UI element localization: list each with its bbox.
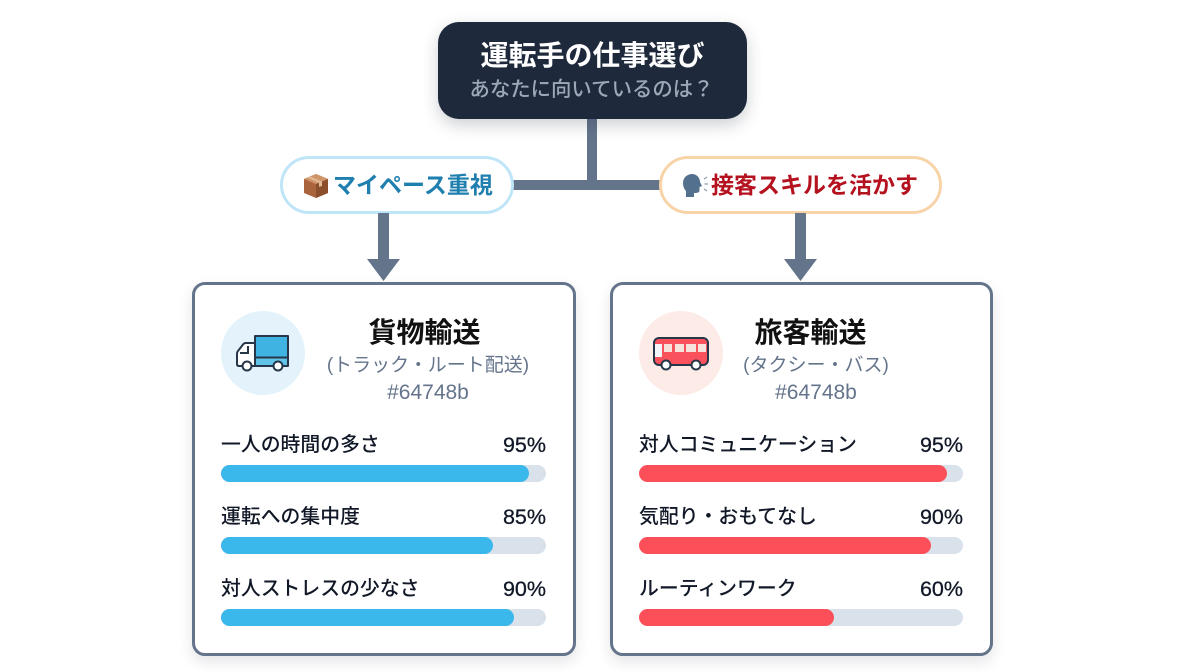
panel: freight card [192, 282, 576, 656]
pill: customer skills [659, 156, 942, 214]
label: ルーティンワーク [639, 578, 797, 600]
label: 運転への集中度 [221, 506, 360, 528]
passenger row 2 [639, 505, 963, 554]
passenger subtitle: (タクシー・バス) [743, 355, 889, 376]
pill label: マイペース重視 [333, 172, 493, 198]
label: 対人コミュニケーション [639, 434, 857, 456]
bus drawing [653, 337, 709, 370]
bar [639, 465, 963, 482]
freight row 2 [221, 505, 546, 554]
value: 60% [920, 577, 963, 601]
passenger heading: 旅客輸送 [754, 317, 866, 348]
value: 95% [920, 433, 963, 457]
label: 気配り・おもてなし [639, 506, 817, 528]
icon: package [304, 174, 328, 198]
freight code: #64748b [387, 381, 469, 404]
arrow: to passenger [784, 213, 817, 281]
truck drawing [236, 335, 289, 372]
freight row 3 [221, 577, 546, 626]
bar [221, 465, 546, 482]
heading: 運転手の仕事選び [480, 40, 704, 71]
bar [221, 609, 546, 626]
bar [639, 609, 963, 626]
passenger row 1 [639, 433, 963, 482]
title box [438, 22, 747, 119]
connector: horizontal branch [510, 180, 664, 190]
pill label: 接客スキルを活かす [711, 172, 918, 198]
icon: speaking head [683, 174, 708, 197]
passenger row 3 [639, 577, 963, 626]
label: 一人の時間の多さ [221, 434, 380, 456]
passenger code: #64748b [775, 381, 857, 404]
value: 90% [920, 505, 963, 529]
panel: passenger card [610, 282, 993, 656]
icon: truck [221, 311, 305, 395]
freight row 1 [221, 433, 546, 482]
connector: vertical trunk [587, 118, 597, 186]
bar [639, 537, 963, 554]
label: 対人ストレスの少なさ [221, 578, 419, 600]
arrow: to freight [367, 213, 400, 281]
pill: my pace [280, 156, 514, 214]
value: 90% [503, 577, 546, 601]
freight heading: 貨物輸送 [368, 317, 480, 348]
subheading: あなたに向いているのは？ [469, 79, 714, 101]
bar [221, 537, 546, 554]
freight subtitle: (トラック・ルート配送) [327, 355, 529, 376]
icon: bus [639, 311, 723, 395]
value: 85% [503, 505, 546, 529]
value: 95% [503, 433, 546, 457]
